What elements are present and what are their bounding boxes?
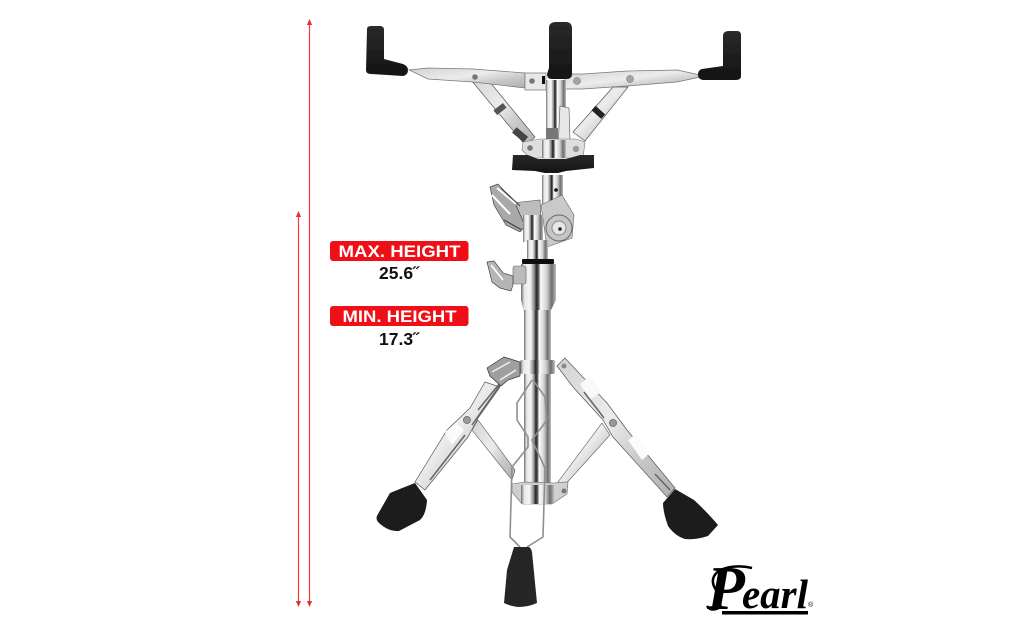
logo: Pearl: P [706,555,746,623]
leg braces [472,420,610,487]
lower basket bracket [522,139,585,158]
left leg [415,378,505,490]
upper leg collar with wing bolt [487,357,566,386]
logo: Pearl: ® [808,601,814,609]
threaded centre rod [546,80,570,155]
centre rim hook [547,22,572,79]
snare stand product photo [366,22,741,607]
right foot [663,489,718,539]
arrow: maximum height [307,19,312,607]
main lower tube [524,310,551,500]
spring wire [510,380,547,547]
callout: min height [330,306,468,349]
basket support arms [471,70,628,146]
right rim hook [698,31,741,80]
callout: max height [330,241,468,283]
logo: Pearl [706,555,814,623]
rubber centre stop [512,155,594,173]
callout: max height: 25.6˝ [379,263,420,283]
left foot [376,483,427,531]
callout: min height: MIN. HEIGHT [342,307,457,326]
basket rim arms [409,68,705,90]
centre foot [504,547,537,607]
left rim hook [366,26,408,76]
callout: min height: 17.3˝ [379,329,420,349]
callout: max height: MAX. HEIGHT [338,242,461,261]
arrow: minimum height [296,211,301,607]
inner height tube [527,240,548,264]
lower leg collar [512,482,568,504]
upper tilt head [490,175,574,247]
right leg [557,358,675,497]
logo: Pearl: earl [742,571,809,617]
height collar with wing bolt [487,259,556,312]
